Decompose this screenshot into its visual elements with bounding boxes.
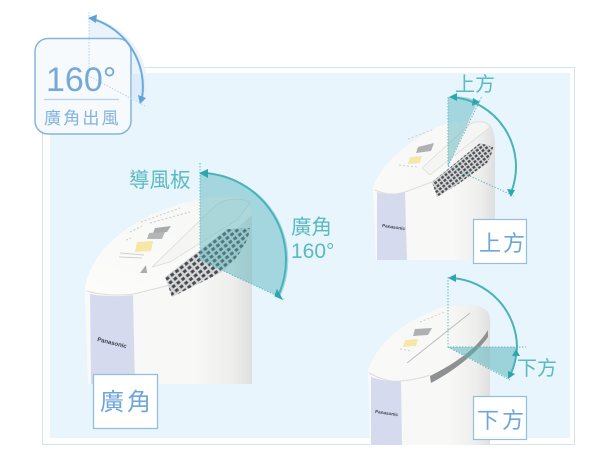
label box: downward: 下方 — [477, 408, 527, 433]
label: downward: 下方 — [517, 357, 557, 380]
label: wide angle value: 160° — [291, 240, 334, 263]
grille — [432, 143, 493, 197]
main dehumidifier: wide angle — [85, 197, 252, 384]
label box: wide angle: 廣角 — [100, 389, 154, 416]
label: deflector: 導風板 — [129, 169, 190, 192]
front colour panel — [90, 294, 135, 384]
label: upward: 上方 — [455, 73, 495, 96]
brand: main unit: Panasonic — [97, 337, 128, 350]
fan: downward — [448, 274, 526, 380]
brand: upper unit: Panasonic — [382, 223, 406, 231]
background panel — [42, 68, 574, 444]
label box: upward: 上方 — [479, 231, 527, 256]
label box: upward — [474, 220, 527, 264]
control labels — [119, 208, 190, 273]
label box: wide angle — [94, 374, 158, 428]
slot line — [407, 313, 470, 363]
closed grille — [430, 330, 488, 383]
fan: upward — [448, 93, 516, 197]
controls — [403, 339, 418, 347]
label: wide angle value: 廣角 — [291, 216, 332, 239]
icon: 160 degree badge — [35, 12, 148, 134]
air louver — [152, 199, 250, 267]
badge caption: 廣角出風 — [44, 109, 121, 128]
label box: downward — [474, 396, 527, 440]
top lid — [85, 197, 251, 295]
label: wide angle value — [291, 216, 334, 263]
fan: wide angle 160 — [199, 163, 288, 299]
lower dehumidifier: downward — [368, 305, 490, 445]
brand: lower unit: Panasonic — [375, 409, 399, 417]
louver — [422, 122, 490, 175]
controls — [408, 156, 422, 164]
upper dehumidifier: upward — [373, 121, 495, 260]
air grille — [165, 228, 250, 297]
badge number: 160° — [46, 61, 116, 99]
